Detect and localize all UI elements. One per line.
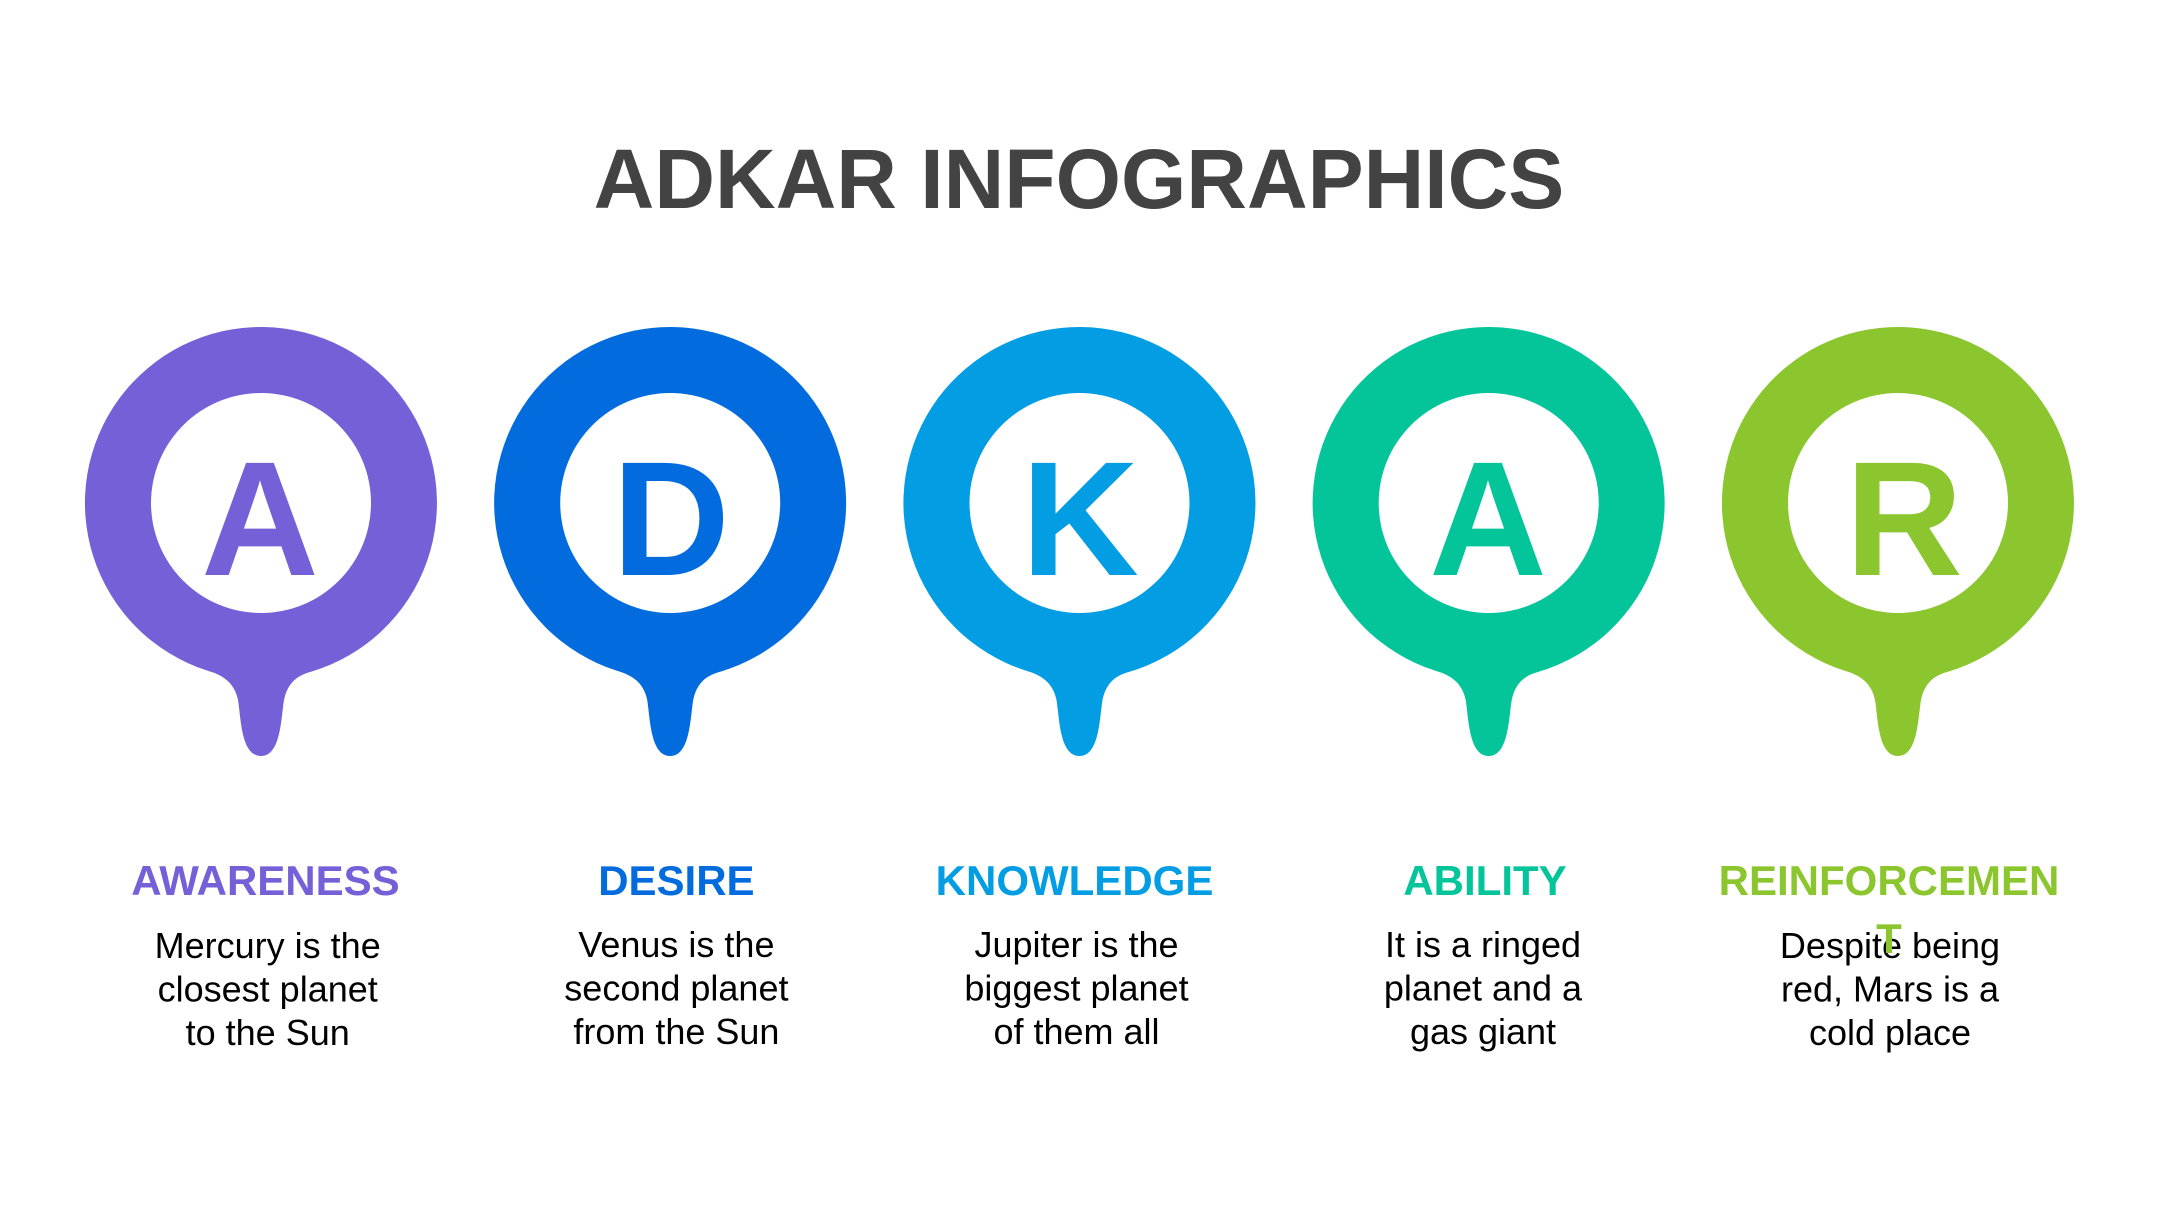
text block: awareness: closest planet — [158, 968, 378, 1010]
pin: A awareness — [85, 327, 437, 756]
text block: ability: It is a ringed — [1385, 924, 1581, 965]
pin: K knowledge: K — [1021, 427, 1139, 610]
pin: R reinforcement — [1722, 327, 2074, 756]
text block: desire: from the Sun — [573, 1011, 779, 1052]
pin: R reinforcement: R — [1845, 427, 1963, 610]
text block: ability: ABILITY — [1403, 857, 1567, 904]
pin: K knowledge — [903, 327, 1255, 756]
text block: desire: second planet — [564, 968, 788, 1008]
text block: desire — [564, 857, 788, 1052]
text block: desire: Venus is the — [578, 924, 774, 965]
text block: knowledge: biggest planet — [964, 968, 1189, 1008]
text block: reinforcement: red, Mars is a — [1781, 968, 2000, 1010]
text block: knowledge: KNOWLEDGE — [936, 857, 1213, 904]
text block: ability — [1384, 857, 1583, 1052]
text block: reinforcement — [1719, 857, 2059, 1053]
text block: knowledge: Jupiter is the — [974, 924, 1179, 965]
pin: A awareness: A — [201, 427, 319, 610]
text block: ability: gas giant — [1410, 1011, 1556, 1052]
text block: knowledge: of them all — [993, 1011, 1160, 1052]
text block: awareness: AWARENESS — [131, 857, 400, 904]
text block: reinforcement: T — [1876, 915, 1902, 962]
pin: D desire — [494, 327, 846, 756]
pin: A ability: A — [1429, 427, 1547, 610]
text block: reinforcement: REINFORCEMEN — [1719, 857, 2059, 904]
title: ADKAR INFOGRAPHICS — [594, 132, 1564, 226]
text block: awareness — [131, 857, 400, 1053]
text block: knowledge — [936, 857, 1213, 1052]
text block: awareness: to the Sun — [186, 1012, 350, 1053]
pin: A ability — [1313, 327, 1665, 756]
text block: ability: planet and a — [1384, 968, 1583, 1008]
pin: D desire: D — [612, 427, 730, 610]
text block: reinforcement: Despite being — [1780, 925, 2000, 966]
text block: awareness: Mercury is the — [155, 925, 381, 966]
text block: reinforcement: cold place — [1809, 1012, 1971, 1053]
text block: desire: DESIRE — [598, 857, 755, 904]
